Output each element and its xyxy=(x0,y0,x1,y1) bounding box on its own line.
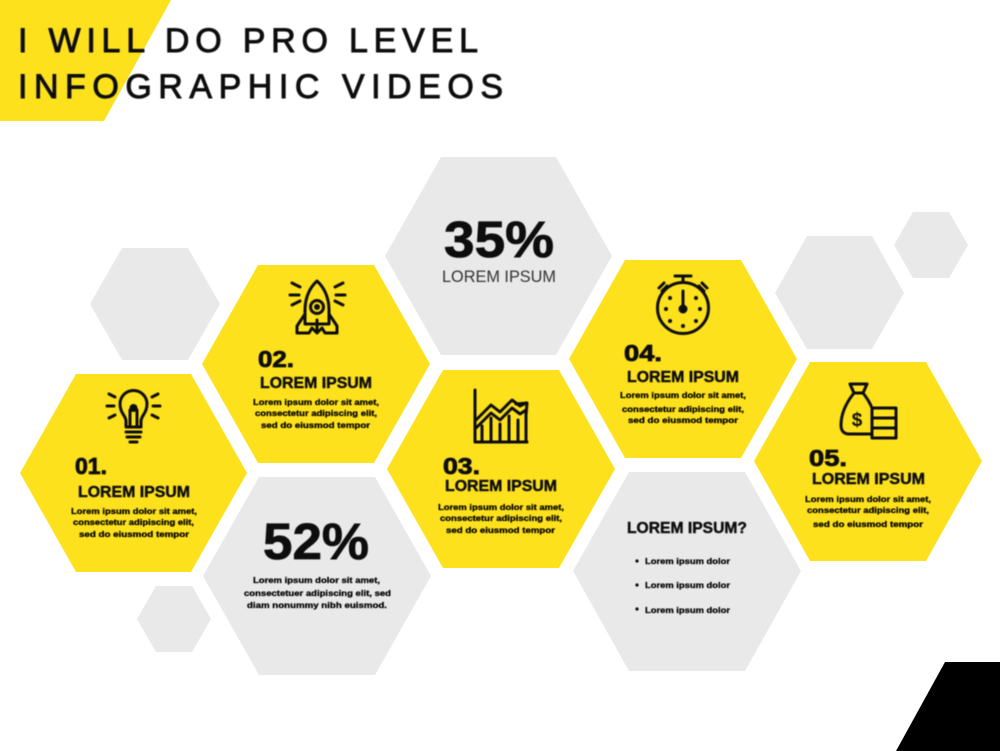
panel: step 03 xyxy=(387,370,615,568)
panel: step 04 xyxy=(569,260,797,458)
step text: consectetur adipiscing elit, xyxy=(807,505,929,515)
icon: money bag and coins: $ xyxy=(852,410,863,431)
panel: 52% stat xyxy=(203,477,431,675)
corner accent: black bottom-right xyxy=(896,662,1000,751)
decorative hexagon: upper right xyxy=(775,236,904,349)
panel: step 02 xyxy=(202,265,430,463)
bullet list: Lorem ipsum dolor xyxy=(645,556,731,566)
step text: Lorem ipsum dolor sit amet, xyxy=(620,390,746,400)
step text: Lorem ipsum dolor sit amet, xyxy=(438,502,564,512)
step heading: LOREM IPSUM xyxy=(260,375,372,392)
step text: consectetur adipiscing elit, xyxy=(255,408,377,418)
panel: question list xyxy=(573,472,801,671)
bullet list: Lorem ipsum dolor xyxy=(645,605,731,615)
step text: Lorem ipsum dolor sit amet, xyxy=(805,494,931,504)
icon: money bag and coins xyxy=(841,384,896,438)
stat value: 52%: 52% xyxy=(263,513,369,570)
step heading: LOREM IPSUM xyxy=(78,484,190,501)
step text: sed do eiusmod tempor xyxy=(79,529,190,539)
step heading: LOREM IPSUM xyxy=(445,478,557,495)
step text: sed do eiusmod tempor xyxy=(261,420,371,430)
step number: 05. xyxy=(809,445,847,471)
stat description: diam nonummy nibh euismod. xyxy=(247,600,387,610)
stat description xyxy=(244,575,391,610)
step text: consectetur adipiscing elit, xyxy=(622,404,744,414)
decorative hexagon: small right xyxy=(894,212,968,278)
step number: 03. xyxy=(443,453,480,479)
step text: consectetur adipiscing elit, xyxy=(440,513,562,523)
corner accent: yellow top-left xyxy=(0,0,171,121)
bullet list: Lorem ipsum dolor xyxy=(645,580,731,590)
decorative hexagon: small lower left xyxy=(137,586,211,652)
title: I WILL DO PRO LEVEL xyxy=(18,22,478,60)
step number: 02. xyxy=(258,346,294,372)
panel: 35% stat xyxy=(385,157,612,355)
step number: 04. xyxy=(624,340,662,366)
title: INFOGRAPHIC VIDEOS xyxy=(18,68,503,106)
step heading: LOREM IPSUM xyxy=(812,471,925,488)
panel: step 01 xyxy=(20,374,247,572)
step text xyxy=(620,390,746,425)
panel: step 05 xyxy=(754,362,982,561)
stat label: LOREM IPSUM xyxy=(442,267,556,286)
step text xyxy=(71,506,197,539)
step text: consectetur adipiscing elit, xyxy=(73,517,194,527)
step heading: LOREM IPSUM xyxy=(627,369,739,386)
list heading: LOREM IPSUM? xyxy=(627,520,747,537)
icon: growth chart xyxy=(475,390,527,442)
step number: 01. xyxy=(75,453,107,479)
step text: sed do eiusmod tempor xyxy=(446,525,556,535)
icon: light bulb xyxy=(107,390,160,442)
step text xyxy=(805,494,931,529)
title xyxy=(18,22,503,106)
step text: Lorem ipsum dolor sit amet, xyxy=(71,506,197,516)
stat value: 35%: 35% xyxy=(444,211,554,268)
step text xyxy=(438,502,564,535)
step text: sed do eiusmod tempor xyxy=(813,519,924,529)
bullet list xyxy=(635,556,731,615)
stat description: Lorem ipsum dolor sit amet, xyxy=(253,575,380,585)
step text: Lorem ipsum dolor sit amet, xyxy=(253,397,379,407)
decorative hexagon: upper left xyxy=(90,248,220,360)
step text: sed do eiusmod tempor xyxy=(628,415,739,425)
stat description: consectetuer adipiscing elit, sed xyxy=(244,588,391,598)
icon: rocket xyxy=(290,281,345,333)
icon: stopwatch xyxy=(658,276,708,334)
step text xyxy=(253,397,379,430)
